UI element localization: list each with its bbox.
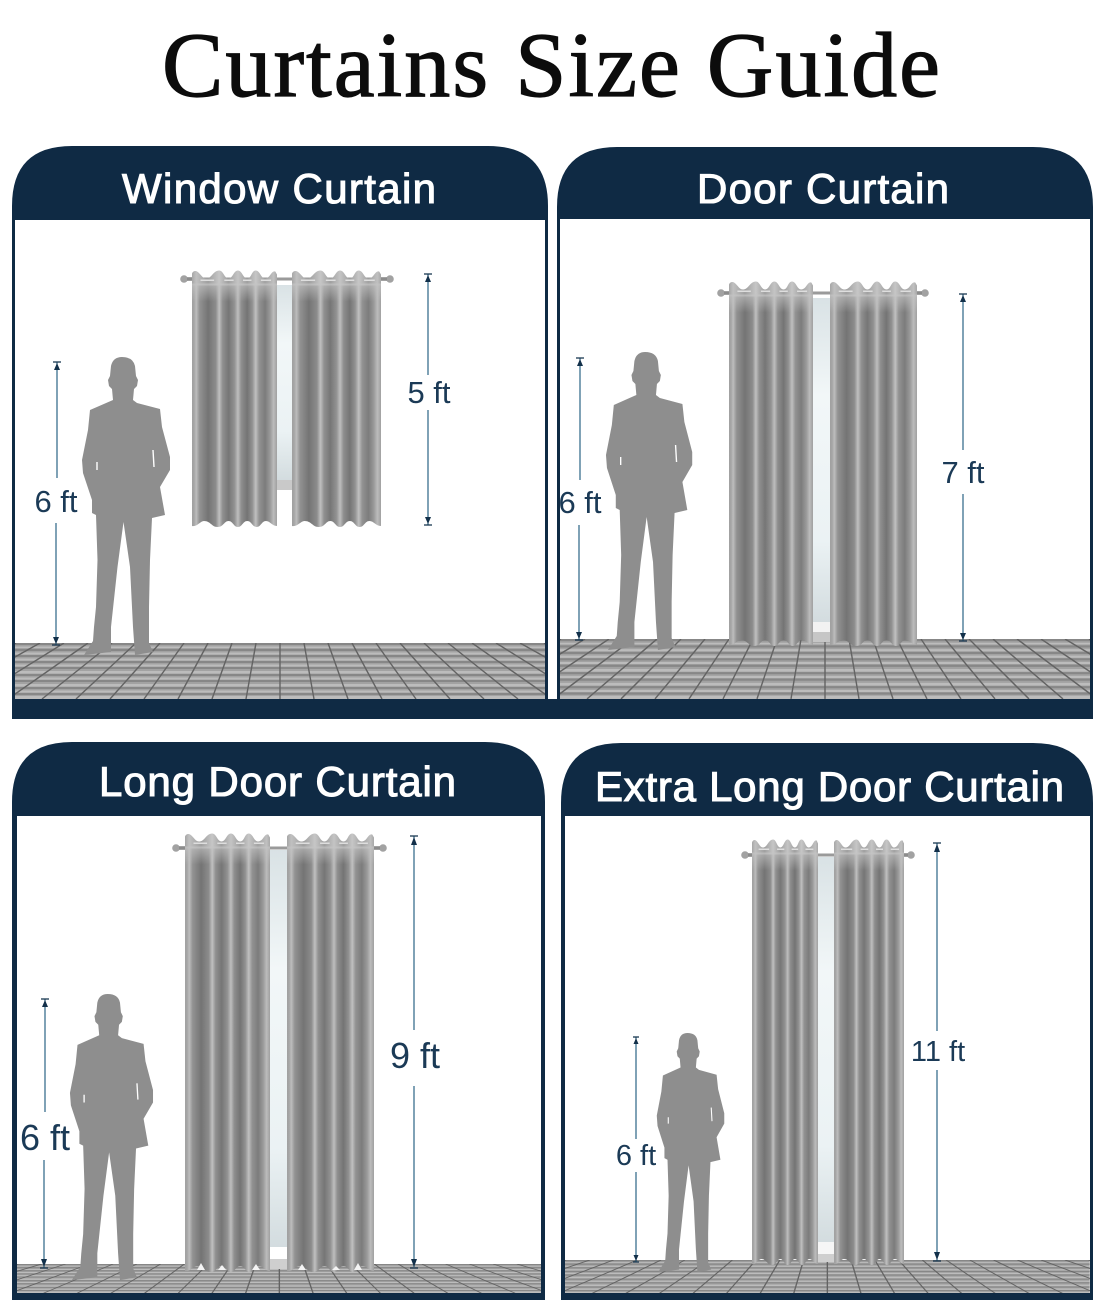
curtain <box>180 270 394 527</box>
panel frame <box>561 743 1093 1300</box>
floor <box>17 1264 541 1293</box>
dimension: 5 ft: 5 ft <box>407 375 451 410</box>
dimension: 6 ft: 6 ft <box>616 1140 656 1172</box>
floor <box>565 1260 1090 1293</box>
panel: extra long door curtain <box>561 743 1093 1300</box>
person silhouette <box>70 994 153 1280</box>
dimension: 6 ft <box>34 362 78 645</box>
dimension: 6 ft: 6 ft <box>20 1117 70 1158</box>
curtain <box>172 834 387 1272</box>
dimension: 9 ft: 9 ft <box>390 1035 440 1076</box>
dimension: 7 ft <box>941 294 985 641</box>
title: Curtains Size Guide <box>162 14 940 116</box>
dimension: 6 ft <box>20 999 70 1268</box>
floor <box>15 643 545 699</box>
heading: Extra Long Door Curtain <box>595 763 1064 810</box>
panel frame <box>12 146 548 699</box>
person silhouette <box>657 1033 724 1272</box>
panel: door curtain <box>557 147 1093 699</box>
floor <box>560 639 1090 699</box>
curtain <box>717 282 929 646</box>
heading: Door Curtain <box>697 165 949 212</box>
person silhouette <box>82 357 170 655</box>
dimension: 6 ft: 6 ft <box>558 485 602 520</box>
dimension: 6 ft: 6 ft <box>34 484 78 519</box>
dimension: 5 ft <box>407 274 451 525</box>
dimension: 6 ft <box>558 358 602 640</box>
panel: window curtain <box>12 146 548 699</box>
dimension: 6 ft <box>616 1037 656 1262</box>
panel frame <box>12 742 545 1300</box>
dimension: 11 ft <box>911 843 965 1261</box>
curtain <box>741 840 915 1265</box>
dimension: 11 ft: 11 ft <box>911 1036 965 1068</box>
dimension: 9 ft <box>390 836 440 1268</box>
panel: long door curtain <box>12 742 545 1300</box>
panel frame <box>557 147 1093 699</box>
heading: Window Curtain <box>122 165 436 212</box>
bottom bar: top row <box>12 699 1093 719</box>
dimension: 7 ft: 7 ft <box>941 455 985 490</box>
person silhouette <box>606 352 692 650</box>
heading: Long Door Curtain <box>99 758 456 805</box>
